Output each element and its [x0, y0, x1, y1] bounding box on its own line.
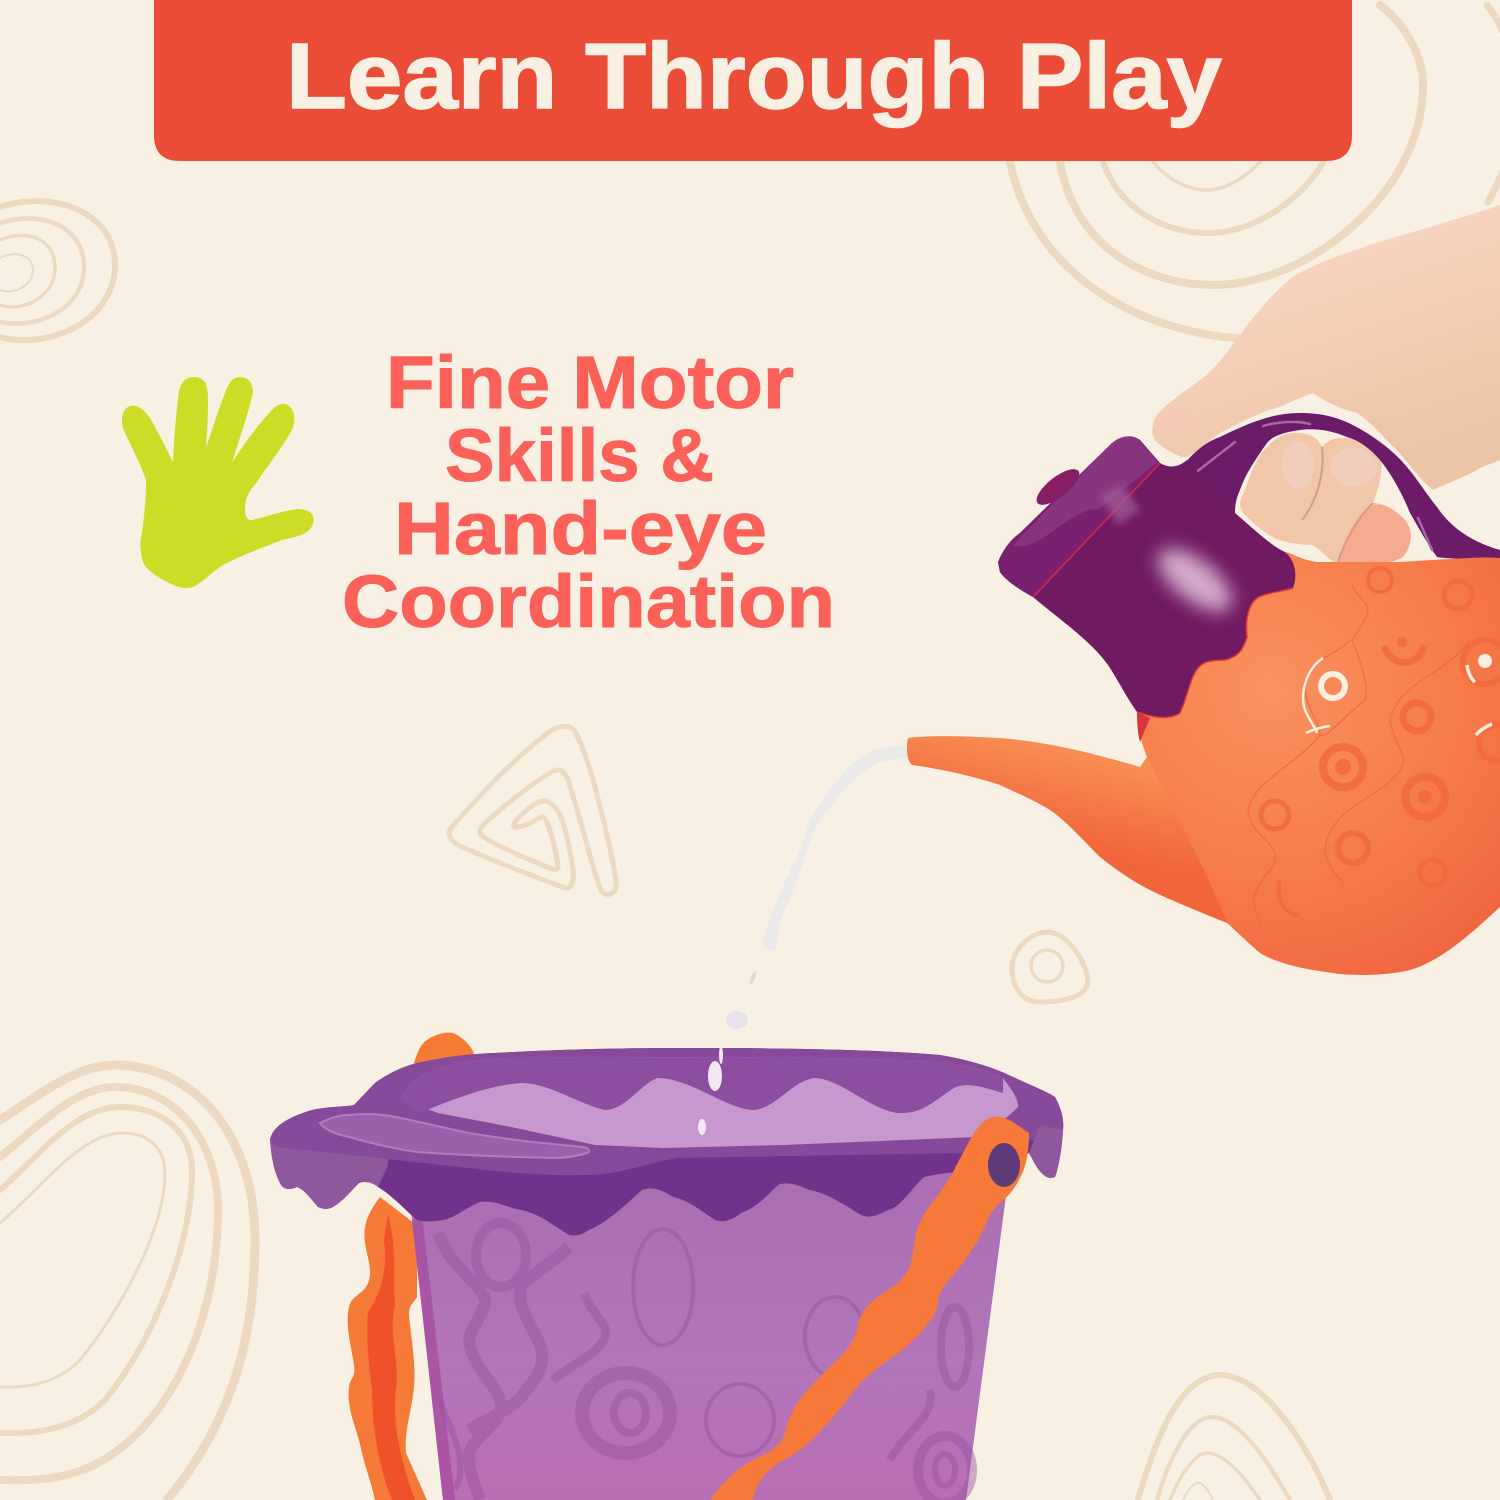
handle left inner [367, 1215, 415, 1500]
neck shine [1100, 485, 1140, 525]
icon: green hand [122, 377, 314, 588]
bucket body [405, 1150, 1012, 1500]
bucket handle left [348, 1197, 427, 1500]
heading: fine motor skills: Skills & [445, 414, 714, 497]
lid opening [1031, 463, 1085, 511]
bucket handle front [710, 1117, 1029, 1500]
can pattern [1248, 568, 1500, 925]
bucket opening [401, 1057, 1018, 1148]
heading: fine motor skills [342, 341, 835, 643]
bucket left shade [412, 1215, 455, 1500]
thumb nail [1154, 400, 1198, 440]
bucket pattern [438, 1223, 972, 1500]
water stream [726, 745, 907, 1029]
title: Learn Through Play [286, 24, 1222, 128]
lid divider [1033, 463, 1160, 597]
opening water drops [698, 1046, 723, 1135]
heading: fine motor skills: Coordination [342, 560, 835, 643]
finger crease [1302, 447, 1373, 562]
heading: fine motor skills: Fine Motor [386, 341, 794, 424]
handle highlights [1190, 422, 1432, 550]
droplets [749, 971, 757, 985]
fingertip [1338, 505, 1411, 564]
rim lip [270, 1048, 1063, 1175]
bucket spout slot [320, 1114, 589, 1158]
bucket rim band [270, 1048, 1063, 1235]
can neck and lid [998, 436, 1295, 742]
rim right drip [1029, 1125, 1063, 1178]
lid rim face [1013, 436, 1158, 546]
handle rivet [988, 1143, 1020, 1187]
can spout [907, 736, 1240, 923]
lid wave edge [1137, 588, 1293, 717]
lid cap [998, 436, 1160, 597]
hand palm and thumb [1152, 205, 1500, 490]
rim left drips [270, 1130, 390, 1209]
bucket handle ear [414, 1033, 474, 1072]
title banner [154, 0, 1352, 161]
watering can handle [1180, 413, 1500, 559]
finger nails [1282, 441, 1377, 489]
bucket opening wave [401, 1057, 1003, 1113]
lid shine [1148, 537, 1242, 623]
fingers [1240, 433, 1411, 564]
can white marks [1303, 654, 1492, 735]
watering can body [1137, 552, 1500, 975]
heading: fine motor skills: Hand-eye [394, 487, 767, 570]
